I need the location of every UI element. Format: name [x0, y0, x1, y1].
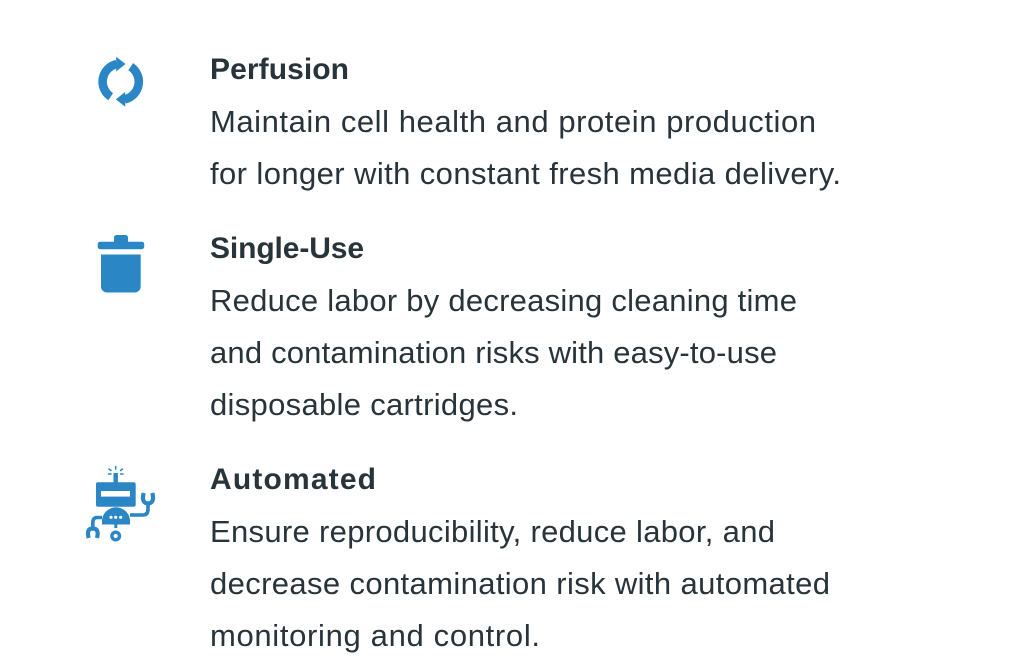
text: Perfusion description: for longer with constant fresh media delivery.: [210, 156, 841, 191]
text: Perfusion description: [210, 104, 841, 191]
item: Single-Use: [98, 232, 797, 422]
text: Perfusion description: Maintain cell health and protein production: [210, 104, 816, 139]
text: Automated description: [210, 514, 830, 653]
heading: Perfusion: Perfusion: [210, 53, 349, 86]
heading: Single-Use: Single-Use: [210, 232, 364, 265]
text: Single-Use description: Reduce labor by decreasing cleaning time: [210, 283, 797, 318]
icon: trash can: [98, 235, 144, 292]
icon: robot: [88, 466, 153, 540]
item: Perfusion: [103, 53, 841, 191]
text: Single-Use description: disposable cartridges.: [210, 387, 518, 422]
text: Automated description: monitoring and control.: [210, 618, 540, 653]
text: Automated description: decrease contamination risk with automated: [210, 566, 830, 601]
heading: Automated: Automated: [210, 463, 376, 496]
item: Automated: [88, 463, 830, 653]
text: Single-Use description: and contamination risks with easy-to-use: [210, 335, 777, 370]
text: Automated description: Ensure reproducibility, reduce labor, and: [210, 514, 775, 549]
icon: circular arrows: [103, 57, 139, 107]
text: Single-Use description: [210, 283, 797, 422]
